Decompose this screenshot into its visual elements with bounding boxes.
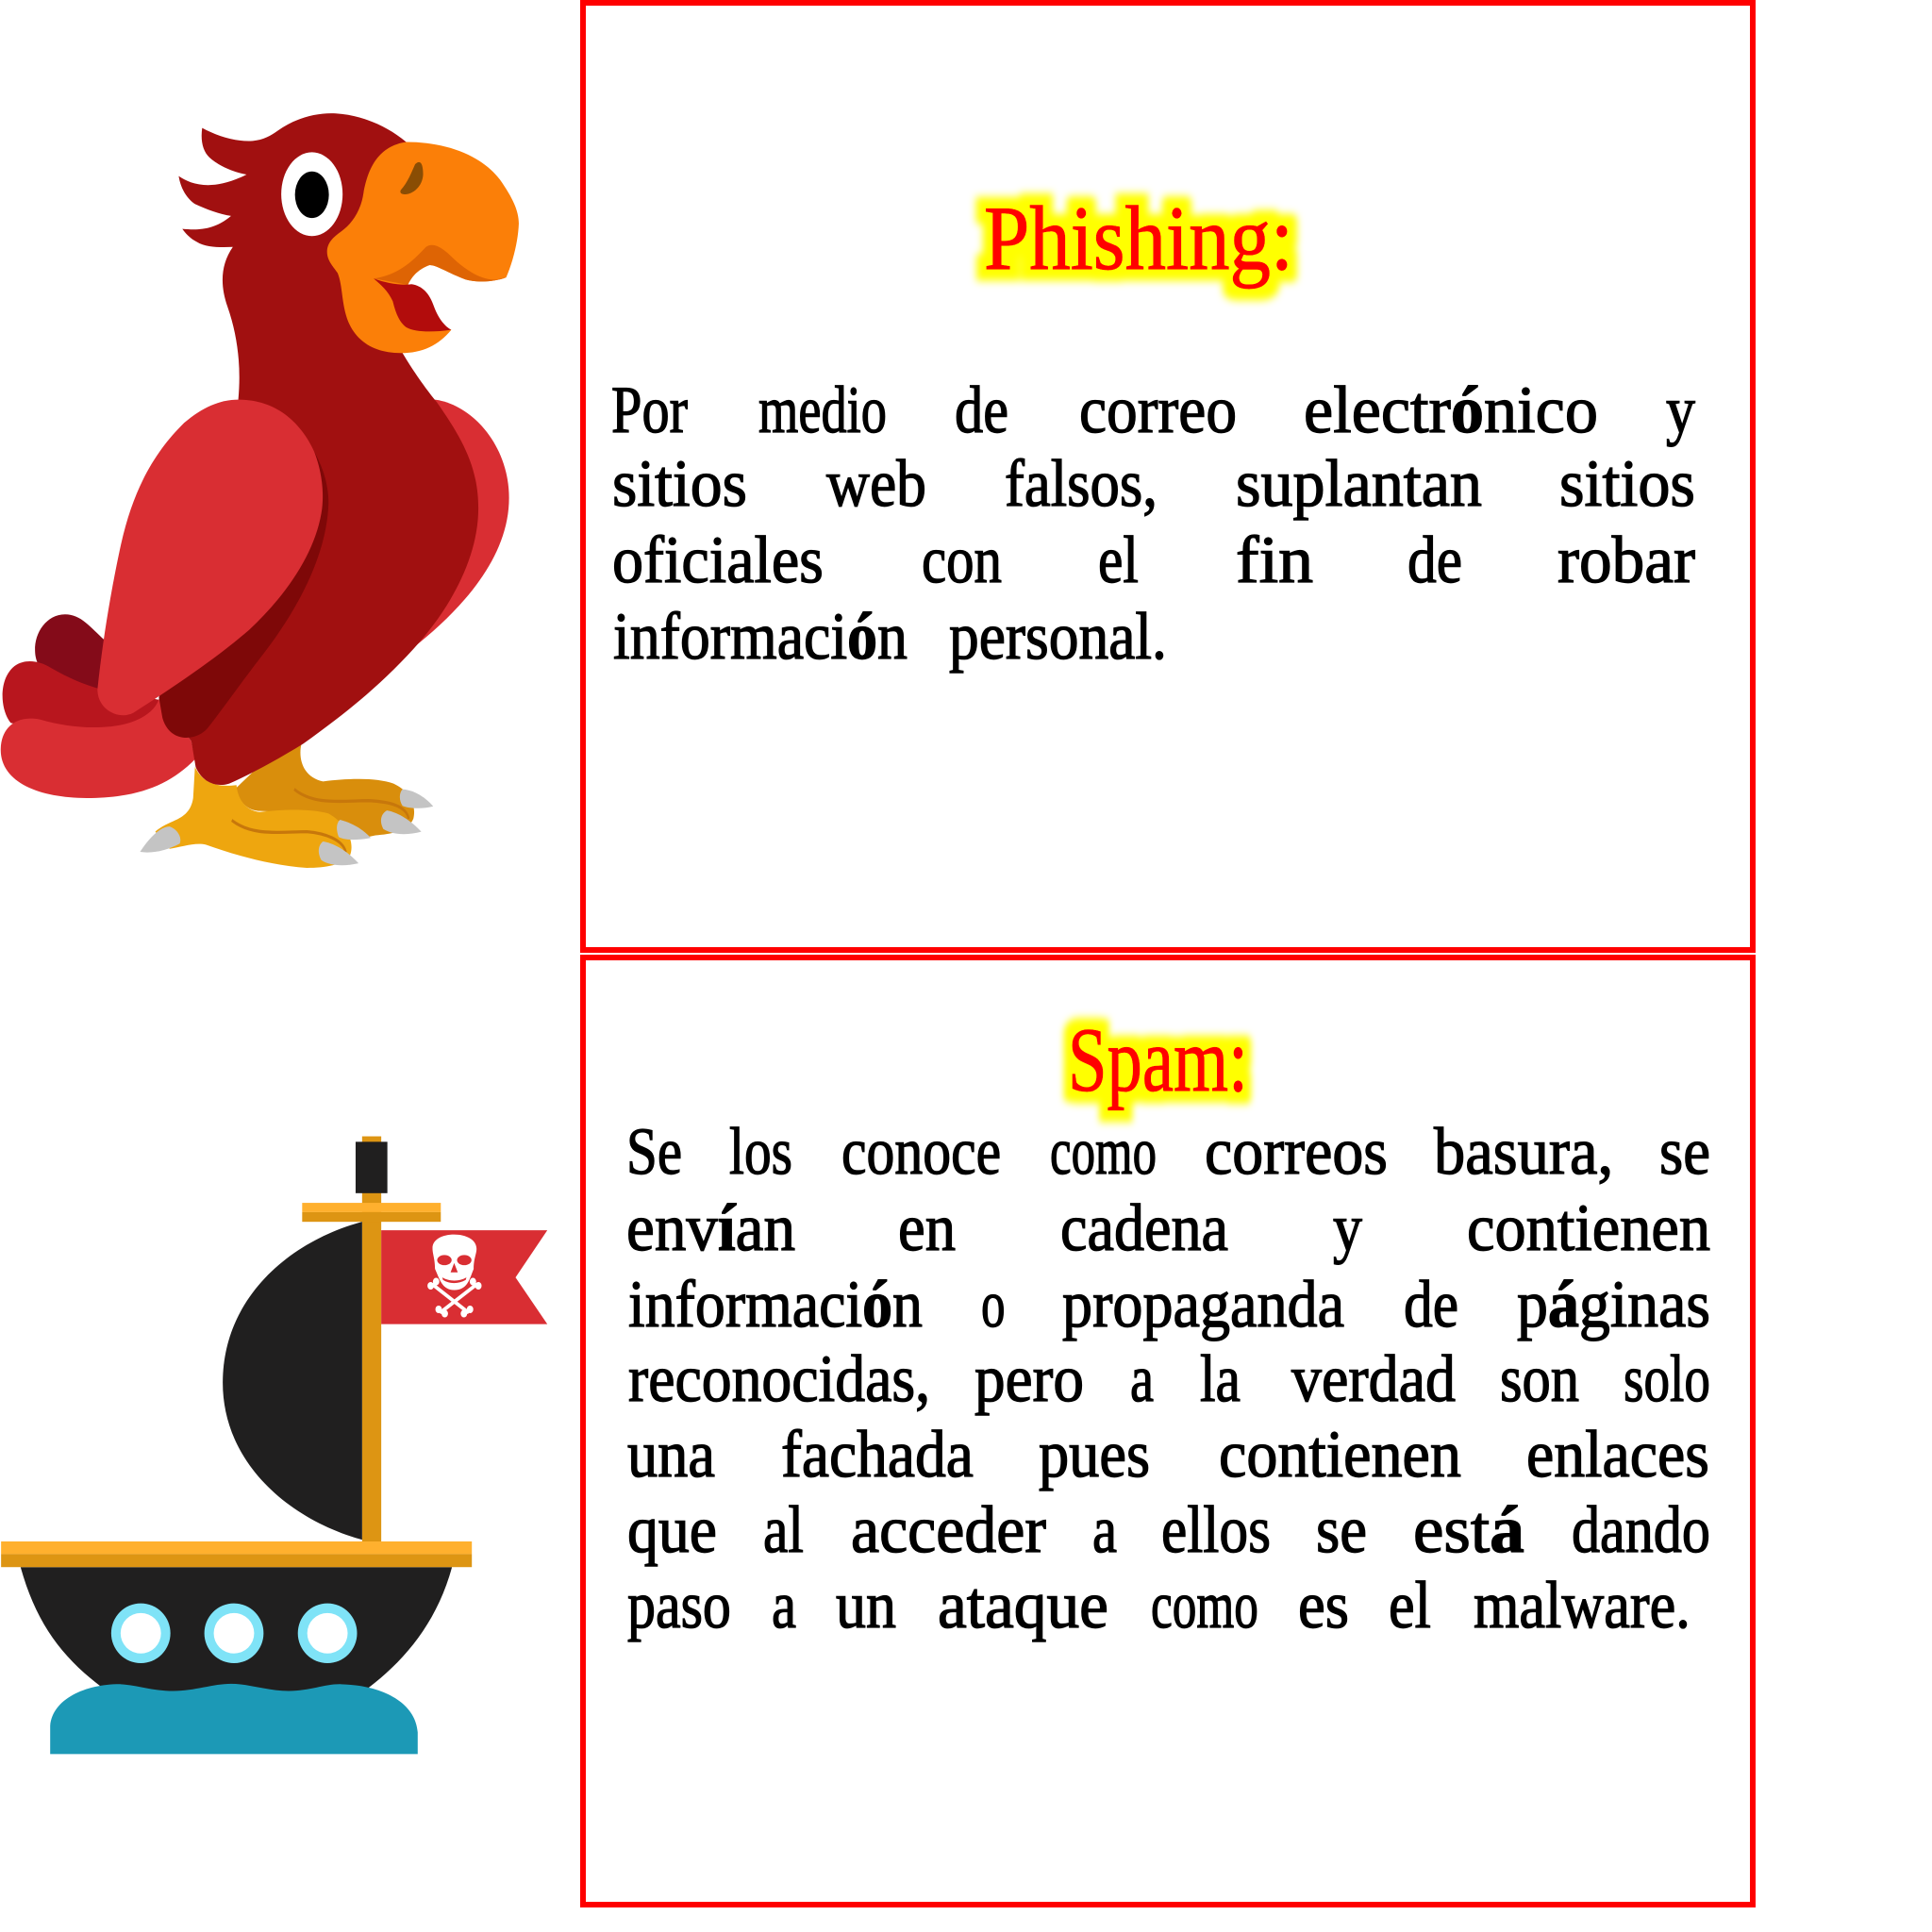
text block: spam description: reconocidas, xyxy=(628,1342,930,1416)
pirate flag xyxy=(381,1230,547,1324)
text block: spam description: pero xyxy=(974,1342,1084,1416)
text block: spam description: como xyxy=(1151,1569,1258,1642)
text block: spam description: la xyxy=(1200,1342,1241,1416)
text block: phishing description: de xyxy=(1407,524,1462,597)
text block: spam description: es xyxy=(1298,1569,1349,1642)
text block: spam description: información xyxy=(628,1268,923,1341)
parrot body xyxy=(158,113,478,785)
text block: spam description: a xyxy=(1130,1342,1154,1416)
text block: spam description: pues xyxy=(1039,1418,1150,1491)
water xyxy=(50,1684,418,1754)
panel border xyxy=(583,3,1753,950)
text block: spam description: a xyxy=(772,1569,796,1642)
illustration: pirate ship xyxy=(1,1137,547,1754)
text block: spam description: al xyxy=(763,1493,804,1567)
text block: spam description: como xyxy=(1050,1115,1157,1189)
text block: phishing description: correo xyxy=(1079,374,1237,447)
text block: phishing description: web xyxy=(826,447,926,521)
parrot near wing xyxy=(97,400,323,715)
parrot eye xyxy=(281,152,342,236)
text block: spam description: en xyxy=(898,1191,956,1265)
text block: spam description: verdad xyxy=(1291,1342,1456,1416)
text block: spam description: dando xyxy=(1572,1493,1710,1567)
panel border xyxy=(583,958,1753,1905)
text block: spam description: envían xyxy=(626,1191,795,1265)
text block: phishing description: información xyxy=(613,600,908,674)
parrot tail xyxy=(1,614,195,798)
text block: spam description: ataque xyxy=(938,1569,1108,1642)
text block: phishing description: sitios xyxy=(1559,447,1695,521)
text block: spam description: solo xyxy=(1624,1342,1710,1416)
text block: phishing description: fin xyxy=(1236,524,1313,597)
text block: spam description: acceder xyxy=(851,1493,1046,1567)
text block: spam description: paso xyxy=(627,1569,731,1642)
text block: spam description: páginas xyxy=(1517,1268,1710,1341)
ship yard xyxy=(302,1203,441,1222)
text block: spam description: malware. xyxy=(1474,1569,1690,1642)
text block: phishing description: robar xyxy=(1557,524,1695,597)
text block: phishing description: y xyxy=(1666,374,1695,447)
text block: phishing description: medio xyxy=(758,374,887,447)
text block: phishing description: oficiales xyxy=(612,524,824,597)
ship mast xyxy=(362,1137,381,1545)
text block: spam description: son xyxy=(1500,1342,1579,1416)
ship crow's nest xyxy=(356,1141,388,1193)
ship hull xyxy=(21,1567,452,1701)
heading: phishing: Phishing: xyxy=(984,188,1293,289)
text block: spam description: a xyxy=(1092,1493,1117,1567)
heading: spam: Spam: xyxy=(1068,1009,1248,1110)
text block: phishing description: electrónico xyxy=(1304,374,1598,447)
parrot beak xyxy=(327,142,519,353)
text block: spam description: y xyxy=(1333,1191,1362,1265)
text block: spam description: contienen xyxy=(1467,1191,1710,1265)
text block: spam description: basura, xyxy=(1434,1115,1613,1189)
text block: spam description: propaganda xyxy=(1062,1268,1344,1341)
text block: phishing description: falsos, xyxy=(1005,447,1158,521)
illustration: red parrot xyxy=(1,113,519,868)
text block: spam description xyxy=(626,1115,1710,1642)
parrot front foot xyxy=(140,767,371,868)
text block: spam description: un xyxy=(836,1569,896,1642)
text block: spam description: enlaces xyxy=(1526,1418,1709,1491)
text block: phishing description: Por xyxy=(611,374,688,447)
text block: spam description: el xyxy=(1389,1569,1431,1642)
text block: spam description: o xyxy=(981,1268,1006,1341)
text block: spam description: los xyxy=(729,1115,792,1189)
text block: spam description: correos xyxy=(1205,1115,1388,1189)
text block: spam description: ellos xyxy=(1161,1493,1271,1567)
text block: phishing description: con xyxy=(922,524,1002,597)
text block: spam description: de xyxy=(1404,1268,1458,1341)
parrot far wing xyxy=(397,400,509,649)
parrot wing shadow xyxy=(158,425,328,738)
text block: phishing description: sitios xyxy=(612,447,747,521)
ship portholes xyxy=(111,1604,357,1663)
text block: spam description: conoce xyxy=(841,1115,1001,1189)
text block: phishing description xyxy=(611,374,1695,674)
text block: spam description: una xyxy=(627,1418,715,1491)
text block: spam description: cadena xyxy=(1060,1191,1228,1265)
ship deck xyxy=(1,1541,472,1567)
ship sail xyxy=(223,1222,362,1540)
text block: spam description: fachada xyxy=(781,1418,974,1491)
text block: spam description: que xyxy=(627,1493,717,1567)
text block: phishing description: suplantan xyxy=(1236,447,1482,521)
panel: spam xyxy=(583,958,1753,1905)
text block: spam description: Se xyxy=(626,1115,682,1189)
parrot back foot xyxy=(237,743,433,837)
text block: phishing description: el xyxy=(1098,524,1139,597)
panel: phishing xyxy=(583,3,1753,950)
text block: phishing description: de xyxy=(955,374,1008,447)
text block: spam description: contienen xyxy=(1219,1418,1461,1491)
text block: phishing description: personal. xyxy=(949,600,1167,674)
text block: spam description: se xyxy=(1316,1493,1367,1567)
text block: spam description: se xyxy=(1659,1115,1710,1189)
text block: spam description: está xyxy=(1413,1493,1524,1567)
